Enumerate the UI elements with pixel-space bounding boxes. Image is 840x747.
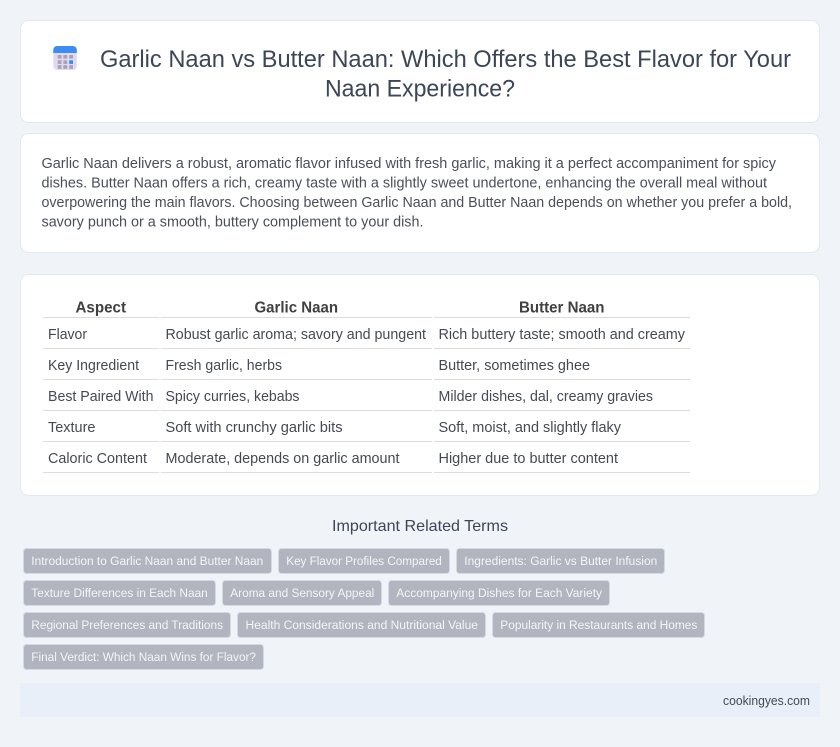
row: texture [48, 420, 622, 436]
title: Garlic Naan vs Butter Naan: Which Offers the Best Flavor for Your [100, 46, 791, 73]
related term tags: Accompanying Dishes for Each Variety [396, 586, 603, 600]
footer [20, 683, 820, 717]
related term tags: Introduction to Garlic Naan and Butter Naan [31, 554, 263, 568]
table header: Aspect [76, 299, 127, 316]
row: best paired with [48, 389, 653, 405]
title [100, 46, 791, 102]
row: best paired with: Spicy curries, kebabs [166, 389, 300, 405]
row: caloric content: Higher due to butter content [438, 451, 618, 467]
panel: intro paragraph: savory punch or a smooth, buttery complement to your dish. [42, 214, 424, 230]
table header [76, 299, 604, 316]
related term tags: Popularity in Restaurants and Homes [500, 618, 697, 632]
row: texture: Soft, moist, and slightly flaky [438, 420, 622, 436]
panel: comparison table [20, 274, 820, 496]
related term tags: Regional Preferences and Traditions [31, 618, 223, 632]
row: key ingredient: Fresh garlic, herbs [166, 358, 282, 374]
related term tags: Aroma and Sensory Appeal [230, 586, 374, 600]
panel: intro paragraph: dishes. Butter Naan offers a rich, creamy taste with a slightly sweet undertone, enhancing the overall meal without [42, 176, 767, 192]
row: caloric content: Caloric Content [48, 451, 147, 467]
row: flavor: Rich buttery taste; smooth and creamy [438, 327, 686, 343]
footer: cookingyes.com [723, 694, 810, 708]
row: caloric content: Moderate, depends on garlic amount [166, 451, 400, 467]
panel: title header [20, 20, 820, 122]
row: best paired with: Milder dishes, dal, creamy gravies [438, 389, 653, 405]
row: key ingredient: Butter, sometimes ghee [438, 358, 590, 374]
panel: intro paragraph: overpowering the main flavors. Choosing between Garlic Naan and Butter Naan depends on whether you prefer a bold, [42, 195, 792, 211]
row: key ingredient [48, 358, 590, 374]
icon: calendar [53, 46, 77, 70]
panel: intro paragraph: Garlic Naan delivers a robust, aromatic flavor infused with fresh garlic, making it a perfect accompaniment for spicy [42, 156, 777, 172]
table header: Butter Naan [519, 299, 604, 316]
title: Naan Experience? [325, 76, 515, 102]
row: caloric content [48, 451, 618, 467]
row: texture: Soft with crunchy garlic bits [166, 420, 342, 436]
row: flavor [48, 327, 686, 343]
row: texture: Texture [48, 420, 96, 436]
heading: important related terms: Important Related Terms [332, 518, 508, 535]
table header: Garlic Naan [254, 299, 338, 316]
related term tags: Final Verdict: Which Naan Wins for Flavor? [31, 650, 256, 664]
row: flavor: Robust garlic aroma; savory and pungent [166, 327, 426, 343]
related term tags [24, 548, 704, 670]
related term tags: Ingredients: Garlic vs Butter Infusion [464, 554, 657, 568]
row: key ingredient: Key Ingredient [48, 358, 139, 374]
related term tags: Key Flavor Profiles Compared [286, 554, 442, 568]
related term tags: Health Considerations and Nutritional Value [246, 618, 478, 632]
panel: intro paragraph [20, 134, 820, 252]
row: best paired with: Best Paired With [48, 389, 154, 405]
row: flavor: Flavor [48, 327, 87, 343]
related term tags: Texture Differences in Each Naan [31, 586, 208, 600]
